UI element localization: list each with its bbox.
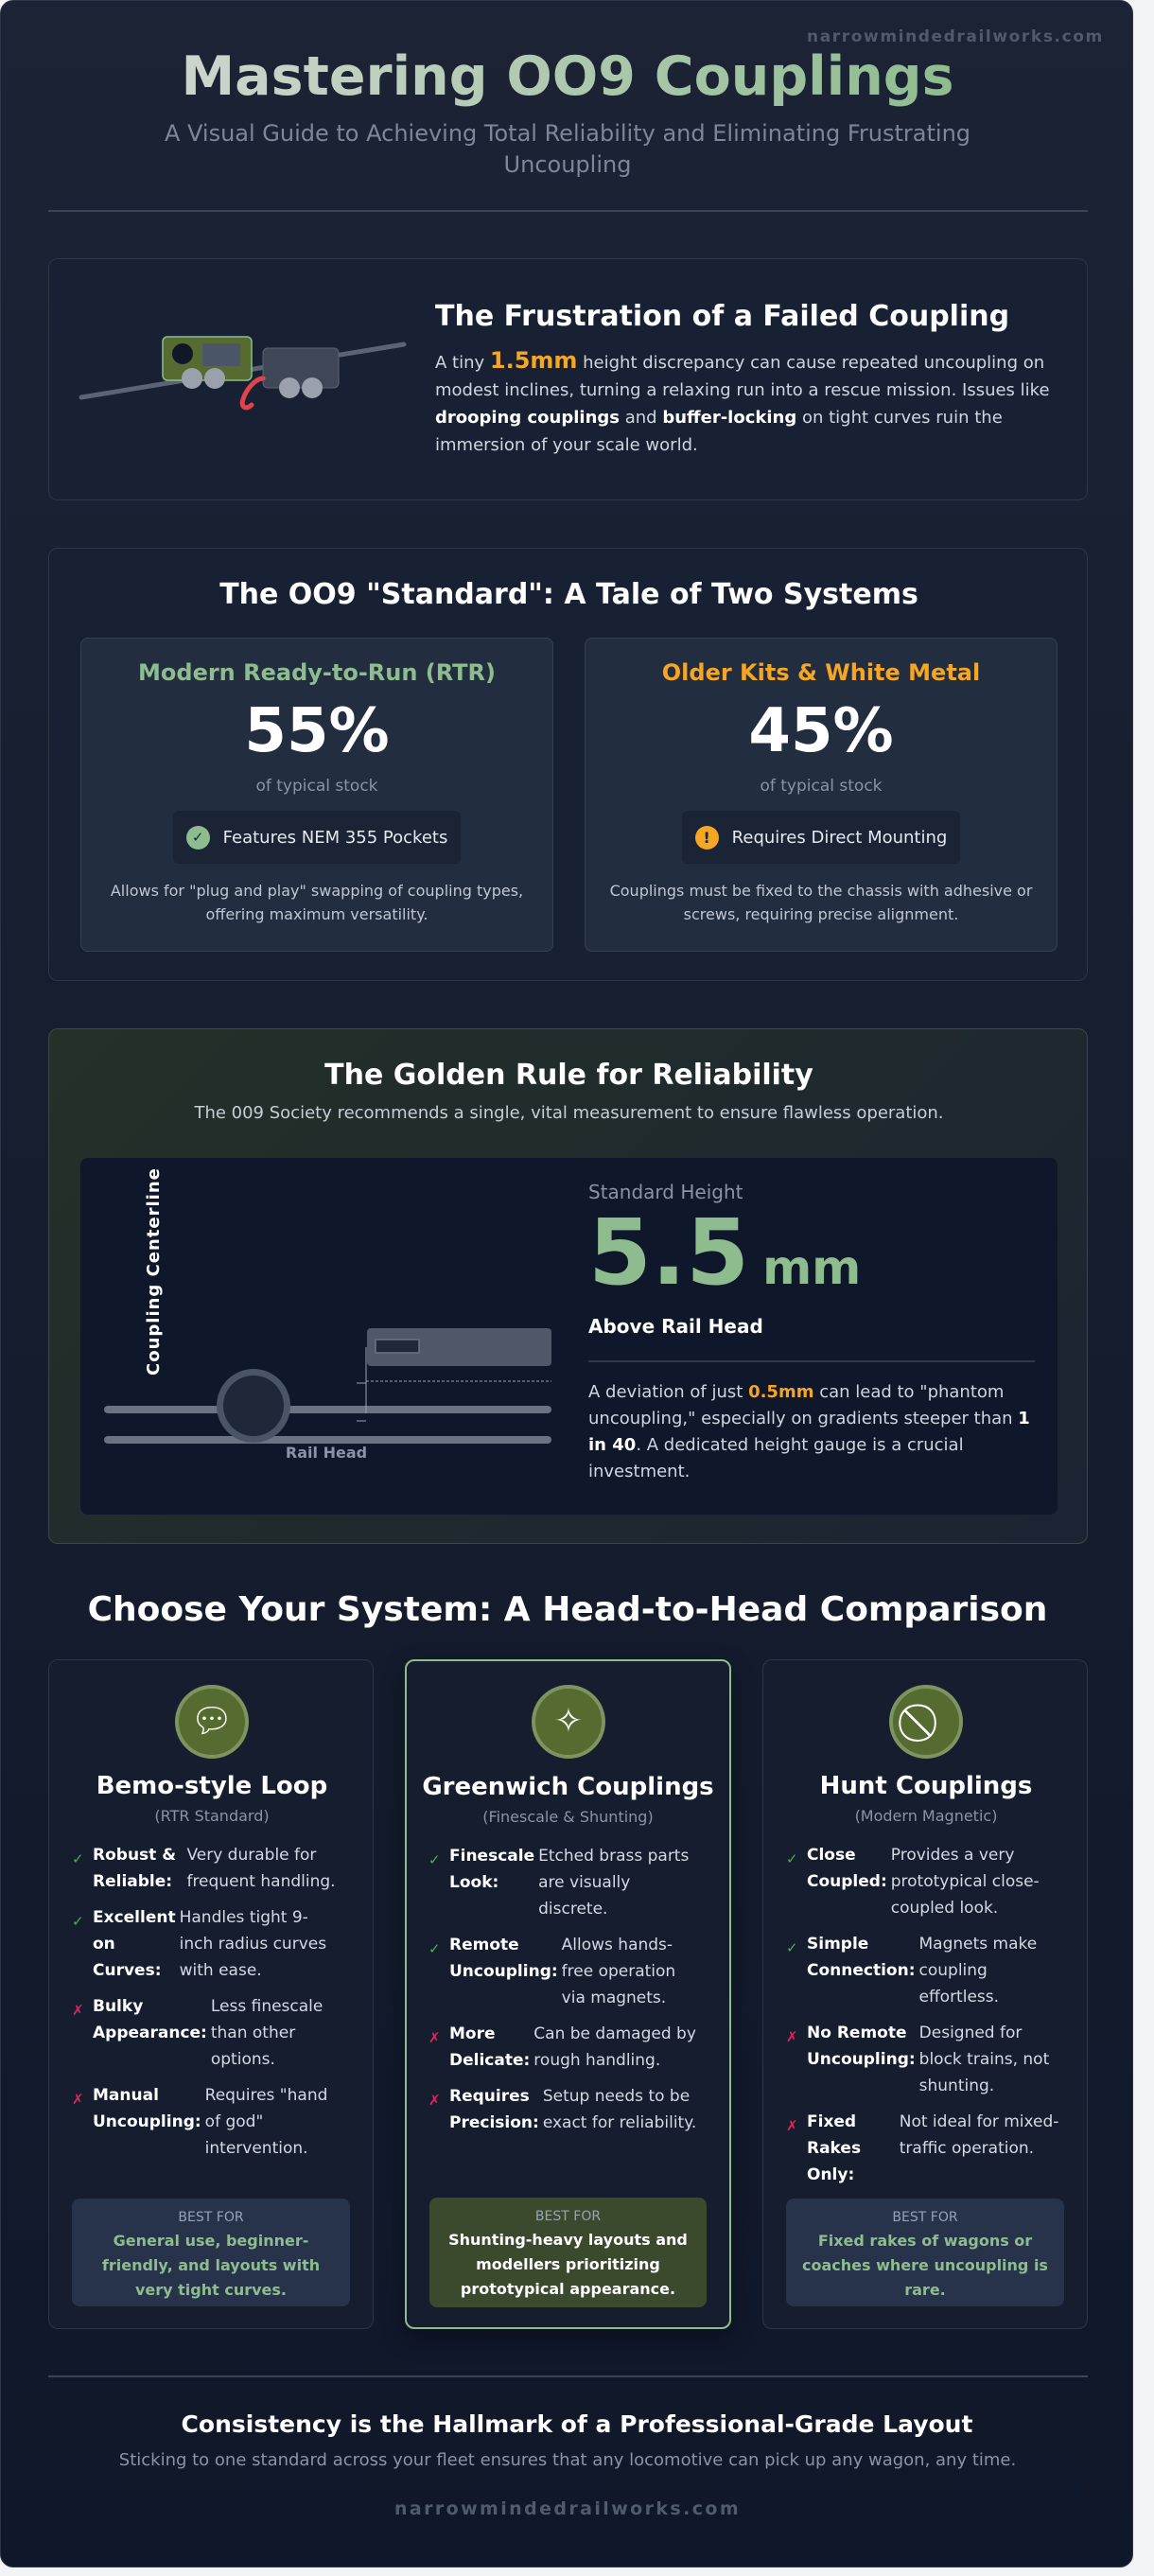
pros/cons list: Can be damaged by rough handling. (533, 2024, 696, 2070)
chart: height diagram: Rail Head (286, 1444, 367, 1462)
pros/cons list: ✗ (786, 2117, 798, 2134)
card: RTR: Modern Ready-to-Run (RTR) (138, 659, 496, 686)
pros/cons list: No Remote Uncoupling: (807, 2024, 916, 2069)
text: standard height: Standard Height (588, 1181, 743, 1203)
badge: ✓ (192, 829, 203, 846)
name: Bemo-style Loop (96, 1772, 327, 1800)
pros/cons list (72, 1846, 336, 2158)
chart: height diagram: Coupling Centerline (144, 1167, 164, 1376)
watermark top: narrowmindedrailworks.com (807, 27, 1104, 46)
pros/cons list: ✓ (428, 1851, 441, 1868)
badge: Features NEM 355 Pockets (223, 827, 447, 848)
best for: General use, beginner-friendly, and layouts with very tight curves. (102, 2232, 320, 2299)
card: RTR: of typical stock (255, 777, 378, 796)
badge: Requires Direct Mounting (732, 827, 947, 848)
text: standard height: Above Rail Head (588, 1315, 763, 1338)
pros/cons list: Fixed Rakes Only: (807, 2112, 861, 2184)
card: older kits: 45% (748, 696, 894, 766)
card: older kits: of typical stock (760, 777, 883, 796)
best for (72, 2199, 350, 2306)
section heading: comparison: Choose Your System: A Head-to-Head Comparison (88, 1590, 1047, 1629)
best for (429, 2198, 707, 2307)
pros/cons list: Remote Uncoupling: (449, 1936, 558, 1981)
pros/cons list: Handles tight 9-inch radius curves with ease. (180, 1908, 326, 1980)
card: Greenwich: (Finescale & Shunting) (482, 1808, 654, 1826)
footer heading: Consistency is the Hallmark of a Professional-Grade Layout (182, 2410, 972, 2438)
icon: chat bubble: 💬︎ (190, 1702, 234, 1741)
title: Mastering OO9 Couplings (181, 45, 954, 108)
text: standard height: A deviation of just 0.5mm can lead to "phantom uncoupling," especially on gradients steeper than 1 in 40. A dedicated height gauge is a crucial investment. (588, 1382, 1030, 1481)
heading: The OO9 "Standard": A Tale of Two Systems (219, 578, 918, 611)
pros/cons list: ✓ (72, 1913, 84, 1930)
pros/cons list: Robust & Reliable: (93, 1846, 176, 1891)
watermark bottom: narrowmindedrailworks.com (394, 2498, 741, 2519)
icon: prohibited (889, 1685, 963, 1759)
badge (682, 811, 960, 864)
card: Greenwich (405, 1659, 731, 2329)
best for: BEST FOR (178, 2210, 244, 2225)
card: Bemo (48, 1659, 374, 2329)
card: Hunt (762, 1659, 1088, 2329)
pros/cons list: Close Coupled: (807, 1846, 887, 1891)
pros/cons list: Etched brass parts are visually discrete. (538, 1847, 689, 1919)
pros/cons list: ✓ (72, 1850, 84, 1867)
best for: BEST FOR (892, 2210, 958, 2225)
pros/cons list: ✗ (428, 2092, 441, 2109)
pros/cons list (786, 1846, 1058, 2184)
pros/cons list: ✗ (428, 2029, 441, 2046)
best for: Shunting-heavy layouts and modellers prioritizing prototypical appearance. (448, 2231, 688, 2298)
pros/cons list: Not ideal for mixed-traffic operation. (900, 2112, 1058, 2158)
subheading: The 009 Society recommends a single, vital measurement to ensure flawless operation. (194, 1103, 944, 1123)
pros/cons list: Requires "hand of god" intervention. (205, 2086, 327, 2158)
inner diagram box (80, 1158, 1058, 1515)
card: Hunt: (Modern Magnetic) (855, 1807, 997, 1825)
pros/cons list: Finescale Look: (449, 1847, 534, 1892)
pros/cons list: ✓ (786, 1850, 798, 1867)
text: standard height (588, 1181, 1035, 1481)
text: standard height: 5.5 mm (588, 1200, 861, 1306)
pros/cons list: ✓ (786, 1939, 798, 1956)
badge: ! (704, 829, 710, 846)
subtitle: A Visual Guide to Achieving Total Reliability and Eliminating Frustrating Uncoupling (165, 120, 970, 178)
icon: wagons uncoupling illustration (79, 336, 407, 411)
pros/cons list: Excellent on Curves: (93, 1908, 176, 1980)
icon: chat bubble (175, 1685, 249, 1759)
card: Bemo: (RTR Standard) (154, 1807, 270, 1825)
best for (786, 2199, 1064, 2306)
panel: golden rule (48, 1028, 1088, 1544)
paragraph: A tiny 1.5mm height discrepancy can cause repeated uncoupling on modest inclines, turning a relaxing run into a rescue mission. Issues like drooping couplings and buffer-locking on tight curves ruin the immersion of your scale world. (435, 347, 1050, 455)
panel: two systems (48, 548, 1088, 981)
pros/cons list: Provides a very prototypical close-coupled look. (891, 1846, 1040, 1918)
pros/cons list: Bulky Appearance: (93, 1997, 207, 2042)
pros/cons list: Manual Uncoupling: (93, 2086, 201, 2131)
icon: sparkles: ✧ (554, 1702, 583, 1741)
icon: sparkles (532, 1685, 605, 1759)
card: older kits (585, 638, 1058, 952)
card: older kits: Couplings must be fixed to the chassis with adhesive or screws, requiring precise alignment. (610, 882, 1032, 923)
name: Greenwich Couplings (422, 1773, 714, 1801)
pros/cons list: ✗ (72, 2091, 84, 2108)
card: RTR: Allows for "plug and play" swapping of coupling types, offering maximum versatility. (111, 882, 523, 923)
footer text: Sticking to one standard across your fleet ensures that any locomotive can pick up any wagon, any time. (119, 2450, 1016, 2470)
pros/cons list: Setup needs to be exact for reliability. (543, 2087, 696, 2132)
badge (173, 811, 461, 864)
pros/cons list (428, 1847, 696, 2132)
pros/cons list: Less finescale than other options. (211, 1997, 323, 2069)
pros/cons list: More Delicate: (449, 2024, 530, 2070)
pros/cons list: ✓ (428, 1940, 441, 1957)
pros/cons list: ✗ (786, 2028, 798, 2045)
pros/cons list: Allows hands-free operation via magnets. (562, 1936, 675, 2007)
pros/cons list: Designed for block trains, not shunting. (919, 2024, 1049, 2095)
name: Hunt Couplings (820, 1772, 1032, 1800)
card: RTR: 55% (244, 696, 390, 766)
card: older kits: Older Kits & White Metal (662, 659, 980, 686)
pros/cons list: Very durable for frequent handling. (186, 1846, 336, 1891)
pros/cons list: Simple Connection: (807, 1935, 916, 1980)
heading: The Frustration of a Failed Coupling (435, 300, 1009, 333)
heading: The Golden Rule for Reliability (324, 1059, 813, 1092)
panel: failed coupling (48, 258, 1088, 500)
pros/cons list: Requires Precision: (449, 2087, 539, 2132)
chart: height diagram (104, 1167, 551, 1462)
best for: Fixed rakes of wagons or coaches where uncoupling is rare. (802, 2232, 1048, 2299)
best for: BEST FOR (535, 2209, 601, 2224)
pros/cons list: ✗ (72, 2002, 84, 2019)
card: RTR (80, 638, 553, 952)
pros/cons list: Magnets make coupling effortless. (919, 1935, 1037, 2006)
